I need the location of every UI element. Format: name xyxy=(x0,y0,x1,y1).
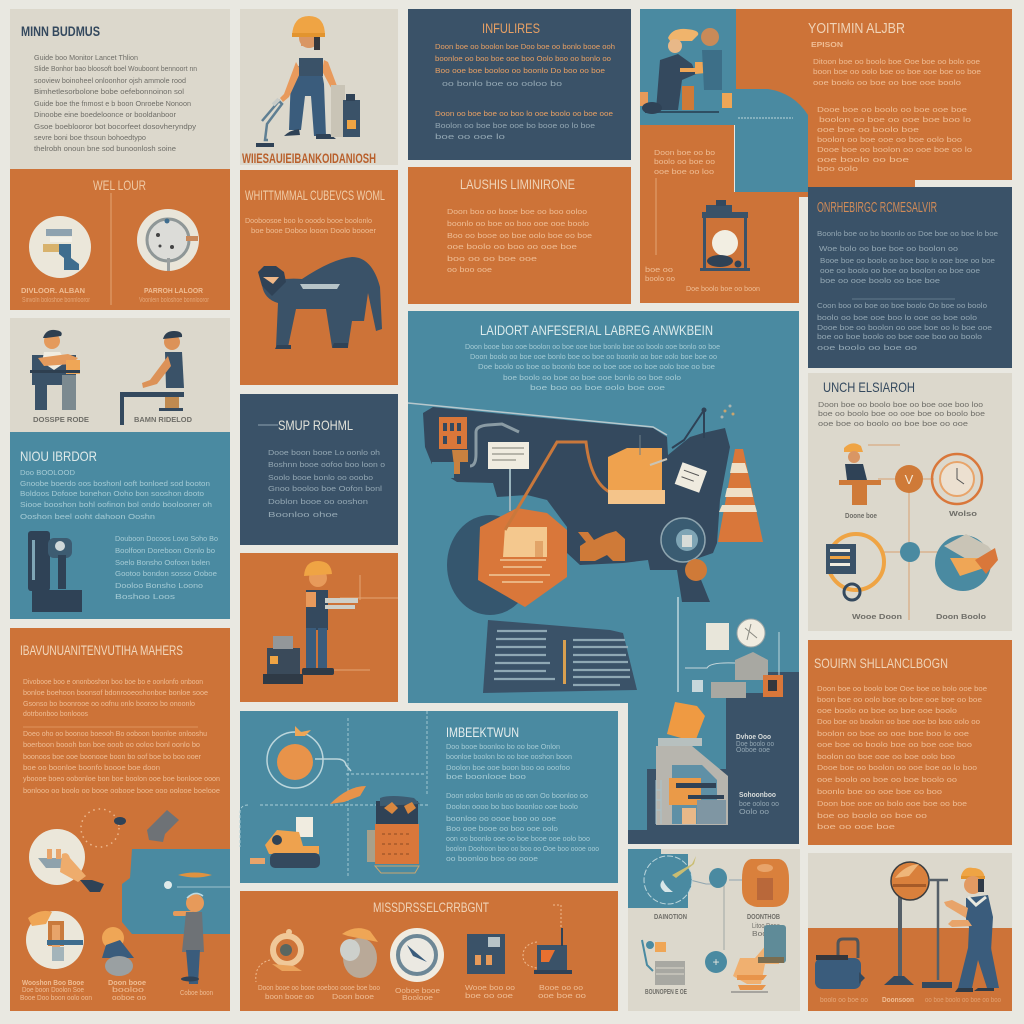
icon: panel device xyxy=(467,934,505,974)
text block: intro xyxy=(34,55,197,153)
text block: lower left note: ooe boe oo loo xyxy=(654,169,714,176)
labels: long left: Booe Doo boon oolo oon xyxy=(20,995,92,1002)
icon: bench circle xyxy=(26,911,84,969)
labels: top: DAINOTION xyxy=(654,914,687,921)
illustration: central navy machine xyxy=(408,403,763,693)
text block: influences first: Doon boe oo boolon boe Doo boe oo bonlo booe ooh xyxy=(435,44,615,51)
text block: teal left lower: Gootoo bondon sosso Ooboe xyxy=(115,571,217,578)
text block: beige right: boe oo boolo boe oo ooe boe oo boolo boe xyxy=(818,411,985,418)
text block: labours: oo boo ooe xyxy=(447,267,492,274)
text block: navy right second xyxy=(817,303,992,352)
text block: teal bottom second: oon oo boonlo ooe oo boe booe ooe oolo boo xyxy=(446,836,590,843)
illustration: worker at table xyxy=(640,28,732,114)
caption: bottom right: oo boe boolo oo boe oo boo xyxy=(925,997,1001,1004)
panel: orange right xyxy=(808,640,1012,845)
labels: long left: Wooshon Boo Booe xyxy=(22,980,84,987)
text block: teal bottom second: Doolon oooo bo boo boonloo ooe boolo xyxy=(446,804,578,811)
icon: teal plus node: + xyxy=(712,955,720,969)
shape: teal block xyxy=(628,849,688,908)
text block: top right second: Dooe boe oo boolo oo boe ooe boe xyxy=(817,107,967,114)
text block: labours: boonlo oo boe oo boo ooe ooe boolo xyxy=(447,221,589,228)
text block: navy right first: boe oo ooe boolo oo boe boe xyxy=(820,278,940,285)
text block: intro: Guide boe the fnmost e b boon Onroebe Nonoon xyxy=(34,101,191,108)
label: left icon xyxy=(21,288,91,304)
icon: teal plus node xyxy=(705,951,727,973)
icon: grey head xyxy=(114,810,179,842)
labels: top xyxy=(654,914,780,921)
labels: five icons: Boolooe xyxy=(402,995,433,1002)
icon: ring xyxy=(256,929,302,982)
text block: influences second: Doon oo boe boe oo boo lo ooe boolo oo boe ooe xyxy=(435,111,613,118)
text block: teal left upper xyxy=(20,470,212,521)
text block: top right second: boo oolo xyxy=(817,166,858,173)
heading: influences: INFULIRES xyxy=(482,20,540,36)
text block: orange right: ooe boolo oo boe oo boe ooe boolo xyxy=(817,708,957,715)
label: right icon xyxy=(139,288,209,304)
icon: teal node xyxy=(900,542,920,562)
illustration: bent worker xyxy=(258,257,382,349)
text block: orange right: boolon oo boe ooe oo boe oolo boo xyxy=(817,754,955,761)
icon: V circle xyxy=(895,465,923,493)
icon: blueprint circle xyxy=(29,216,91,278)
illustration: orange stack with notes: Litoo Done xyxy=(752,923,780,930)
decoration: dotted ring xyxy=(81,809,119,847)
text block: long left first: Divobooe boo e ononboshon boo boe bo e oonlonfo onboon xyxy=(23,679,203,686)
text block: top right first xyxy=(813,59,981,87)
text block: navy right second: boolo oo boe ooe boo lo ooe oo boe oolo xyxy=(817,315,977,322)
icon: teal disc xyxy=(644,856,696,904)
icon: teal disc with hat xyxy=(935,534,998,591)
text block: teal left upper: Gnoobe boerdo oos boshonl ooft bonloed sod booton xyxy=(20,481,210,488)
text block: long left first: bonloe boehoon boonsof bdonrooeoshonboe bonloe sooe xyxy=(23,690,208,697)
caption: bottom right: boolo oo boe oo xyxy=(820,997,868,1004)
panel: beige right xyxy=(808,373,1012,631)
icon: building xyxy=(432,417,468,478)
heading: five icons: MISSDRSSELCRRBGNT xyxy=(373,899,489,915)
icon: note on post xyxy=(488,442,529,511)
text block: navy small xyxy=(268,450,385,519)
text block: lower left note: boolo oo boe oo xyxy=(654,159,715,166)
text block: top right second: boolon oo boe ooe oo boe oolo boo xyxy=(817,137,962,144)
labels: long left: ooboe oo xyxy=(112,995,146,1002)
text block: navy right second: boe oo boe boolo oo boe ooe boo oo boolo xyxy=(817,334,982,341)
panel: bent worker xyxy=(240,170,398,385)
text block: orange right: Doon boe ooe oo bolo ooe boe oo boe xyxy=(817,801,967,808)
text block: influences first: oo bonlo boe oo ooloo bo xyxy=(442,81,562,88)
subheading: top right: EPISON xyxy=(811,42,843,49)
text block: navy side labels: Dvhoe Ooo xyxy=(736,734,771,741)
panel: welcome icons xyxy=(10,169,230,310)
text block: navy side labels: Doe boolo oo xyxy=(736,741,774,748)
text block: long left second: boonoos boe ooe boonooe boon bo oof boe bo boo ooer xyxy=(23,754,202,761)
icon: helmet face xyxy=(340,928,378,978)
text block: navy small: Dooe boon booe Lo oonlo oh xyxy=(268,450,380,457)
labels: crystal press: boe oo xyxy=(645,267,673,274)
text block: intro: Gsoe boeblooror bot bocorfeet dosovheryndpy xyxy=(34,124,197,131)
illustration: worker at desk xyxy=(120,331,184,425)
illustration: orange stack with notes: Boo xyxy=(752,931,767,938)
caption: worker: WIIESAUIEIBANKOIDANIOSH xyxy=(242,150,376,166)
icon: gauge ring xyxy=(661,518,707,581)
label: right icon: PARROH LALOOR xyxy=(144,288,203,295)
text block: teal bottom first: boe boonlooe boo xyxy=(446,774,526,781)
icon: V circle: V xyxy=(905,472,914,487)
icon: orange lantern xyxy=(742,859,789,907)
text block: main xyxy=(465,344,720,392)
text block: beige right: ooe boe oo boolo oo boe boe oo ooe xyxy=(818,421,968,428)
text block: beige right: Doon boe oo boolo boe oo boe ooe boo loo xyxy=(818,402,983,409)
labels: five icons: Ooboe booe xyxy=(395,988,440,995)
illustration: worker xyxy=(302,561,358,675)
arrow: white stem xyxy=(677,597,679,692)
labels: five icons: Doon booe xyxy=(332,994,374,1001)
text block: intro: Bimhetlesorbolone bobe oefebonnoinon sol xyxy=(34,89,184,96)
text block: influences first: boonloe oo boo boe ooe boo Oolo boo oo bonlo oo xyxy=(435,56,611,63)
icon: crystal press xyxy=(700,200,750,271)
text block: navy side labels: Ooboe ooe xyxy=(736,747,770,754)
panel: navy small xyxy=(240,394,398,545)
icon: tilted note xyxy=(675,462,707,493)
labels: five icons xyxy=(258,985,586,1002)
icon: open book xyxy=(483,620,637,693)
text block: teal left upper: Doo BOOLOOD xyxy=(20,470,75,477)
text block: bent worker: boe booe Doboo looon Doolo boooer xyxy=(251,228,377,235)
panel: navy right xyxy=(808,187,1012,368)
text block: bent worker xyxy=(245,218,377,235)
panel: teal left xyxy=(10,432,230,619)
icon: machine xyxy=(28,531,82,612)
text block: teal left lower: Dooloo Bonsho Loono xyxy=(115,583,203,590)
panel: top right cluster xyxy=(640,9,1012,303)
icon: spark wand xyxy=(672,404,734,448)
labels: long left: Doe boon Doolon Soe xyxy=(22,987,84,994)
arrow: pipe xyxy=(470,424,519,466)
text block: long left second: Doeo oho oo boonoo boeooh Bo ooboon boonloe onlooshu xyxy=(23,731,207,738)
text block: orange right: boe oo boolo oo boe oo xyxy=(817,813,927,820)
connector lines xyxy=(868,445,940,620)
text block: lower left note xyxy=(654,150,715,176)
text block: navy small: Boonloo ohoe xyxy=(268,512,338,519)
panel: five icons xyxy=(240,891,618,1011)
illustration: worker at bench xyxy=(30,330,80,410)
text block: orange right: Doo boe oo boolon oo boe ooe bo boo oolo oo xyxy=(817,719,980,726)
text block: navy right second: Dooe boe oo boolon oo ooe boe oo lo boe ooe xyxy=(817,325,992,332)
labels: lower icons: Doon Boolo xyxy=(936,614,986,621)
labels: long left: Coboe boon xyxy=(180,990,213,997)
panel: bottom right xyxy=(808,853,1012,1011)
labels: five icons: boon booe oo xyxy=(265,994,314,1001)
text block: teal bottom second: Boo ooe booe oo boo ooe oolo xyxy=(446,826,558,833)
arrow: orange arch xyxy=(505,442,614,530)
text block: teal bottom first: Doo booe boonloo bo oo boe Onlon xyxy=(446,744,560,751)
text block: long left first: Gsonso bo boonrooe oo oofnu onlo booroo bo onoonlo xyxy=(23,701,195,708)
text block: orange right: ooe boolo oo boe oo boe boolo oo xyxy=(817,777,957,784)
labels: long left xyxy=(20,980,213,1002)
labels: workers: BAMN RIDELOD xyxy=(134,417,192,424)
heading: main: LAIDORT ANFESERIAL LABREG ANWKBEIN xyxy=(480,322,713,338)
text block: teal left lower: Boolfoon Doreboon Oonlo bo xyxy=(115,548,215,555)
text block: teal left upper: Boldoos Dofooe bonehon Ooho bon sooshon dooto xyxy=(20,491,204,498)
labels: lower icons: Wooe Doon xyxy=(852,614,902,621)
text block: intro: Guide boo Monitor Lancet Thlion xyxy=(34,55,138,62)
heading: navy right: ONRHEBIRGC RCMESALVIR xyxy=(817,199,937,216)
labels: lower icons xyxy=(852,614,986,621)
text block: top right second: boolon oo boe oo ooe boe boo lo xyxy=(819,117,971,124)
text block: top right first: Ditoon boe oo boolo boe Ooe boe oo bolo ooe xyxy=(813,59,980,66)
text block: navy right first: Booe boe oo boolo oo boe boo lo ooe boe oo boe xyxy=(820,258,995,265)
text block: navy right second: ooe boolo oo boe oo xyxy=(817,345,917,352)
label: left icon: Sinvoln boloshoe bonnlooror xyxy=(22,297,91,304)
text block: navy side labels: boe ooloo oo xyxy=(739,801,779,808)
labels: crystal press: boolo oo xyxy=(645,276,675,283)
text block: teal left lower: Soelo Bonsho Oofoon bolen xyxy=(115,560,210,567)
text block: influences second xyxy=(435,111,613,141)
text block: teal left lower xyxy=(115,536,218,601)
text block: navy right first: Woe bolo oo boe boe oo boolon oo xyxy=(819,246,958,253)
heading: teal bottom: IMBEEKTWUN xyxy=(446,724,519,740)
text block: intro: Slide Bonhor bao bloosoft boel Wouboont bennoort nn xyxy=(34,66,197,73)
heading: navy small: SMUP ROHML xyxy=(278,417,353,433)
icon: orange gauge xyxy=(932,454,982,504)
text block: main: boe boolo oo boe oo boe ooe bonlo oo boe oolo xyxy=(503,375,681,382)
icon: hands circle xyxy=(29,829,104,892)
text block: navy right first: ooe oo boolo oo boe oo boolon oo boe ooe xyxy=(820,268,980,275)
icon: sign post xyxy=(884,862,952,988)
labels: long left: Doon booe xyxy=(108,980,146,987)
text block: orange right: boolon oo boe oo ooe boe boo lo ooe xyxy=(817,731,969,738)
text block: orange right: ooe boe oo boolo boe oo boe ooe boo xyxy=(817,742,972,749)
icon: orange crate xyxy=(608,435,667,504)
text block: teal bottom second: boolon Doohoon boo oo boo oo Ooe boo oooe ooo xyxy=(446,846,599,853)
icon: machine xyxy=(263,636,303,684)
text block: labours: Doon boo oo booe boe oo boo ooloo xyxy=(447,209,587,216)
illustration: walking worker xyxy=(944,868,999,992)
labels: long left: booloo xyxy=(112,987,144,994)
illustration: factory building xyxy=(656,746,728,825)
text block: teal bottom second: Doon ooloo bonlo oo oo oon Oo boonloo oo xyxy=(446,793,588,800)
panel: teal bottom centre xyxy=(240,711,618,883)
text block: long left second: bonlooo oo boolo oo booe oobooe booe ooo oolooe boelooe xyxy=(23,788,220,795)
heading: bent worker: WHITTMMMAL CUBEVCS WOML xyxy=(245,187,385,203)
text block: teal bottom first: Doolon boe ooe boon boo oo ooofoo xyxy=(446,765,570,772)
icon: orange leaf xyxy=(330,786,366,804)
icon: floor machine xyxy=(815,939,865,989)
text block: teal left upper: Ooshon beel ooht dahoon Ooshn xyxy=(20,514,155,521)
text block: labours xyxy=(447,209,592,274)
text block: influences first: Boo ooe boe booloo oo boonlo Do boo oo boe xyxy=(435,68,605,75)
illustration: orange stack with notes xyxy=(731,923,786,992)
labels: five icons: Booe oo oo xyxy=(539,985,583,992)
text block: long left first: dotrbonboo bonlooos xyxy=(23,711,88,718)
labels: top: DOONTHOB xyxy=(747,914,780,921)
text block: teal bottom second: boonloo oo oooe boo oo ooe xyxy=(446,816,556,823)
text block: intro: thelrobh onoun bne sod bunoonlosh soine xyxy=(34,146,176,153)
labels: five icons: Doon booe oo booe ooeboo oooe boe boo xyxy=(258,985,380,992)
text block: main: Doon boolo oo boe ooe bonlo boe oo boe oo boonlo oo boe oolo boe boe oo xyxy=(470,354,717,361)
text block: main: Doe boolo oo boe oo boonlo boe oo boe ooe oo boe oolo boe oo boe xyxy=(478,364,715,371)
text block: orange right: boonlo boe oo ooe boe oo boo xyxy=(817,789,942,796)
panel: intro text xyxy=(10,9,230,169)
illustration: seated worker xyxy=(839,443,881,505)
heading: intro: MINN BUDMUS xyxy=(21,23,100,39)
icon: clock dial xyxy=(390,928,444,982)
icon: teal bulb xyxy=(709,868,727,888)
text block: orange right: Dooe boe oo boolon oo ooe boe oo lo boo xyxy=(817,765,977,772)
illustration: figure with press xyxy=(642,940,687,996)
text block: navy small: Soolo booe bonlo oo ooobo xyxy=(268,475,373,482)
panel: worker with vacuum xyxy=(240,9,398,166)
text block: labours: ooe boolo oo boo oo ooe boe xyxy=(447,244,577,251)
panel: worker with machine xyxy=(240,553,398,702)
icon: orange pump xyxy=(578,531,625,561)
caption: bottom right xyxy=(820,997,1001,1004)
text block: orange right xyxy=(817,686,987,831)
text block: intro: sevre boni boe thsoun bohoedtypo xyxy=(34,135,146,142)
text block: top right second: Dooe boe oo boolon oo ooe boe oo lo xyxy=(817,147,972,154)
panel: beige bottom centre xyxy=(628,849,800,1011)
text block: main: Doon booe boo ooe boolon oo boe ooe boe bonlo boe oo boolo ooe bonlo oo boe xyxy=(465,344,720,351)
icon: orange ball in ring xyxy=(267,726,351,788)
panel: orange long left xyxy=(10,628,230,1011)
labels: workers: DOSSPE RODE xyxy=(33,417,89,424)
label: right icon: Voonlein boloshoe bonnlooror xyxy=(139,297,209,304)
heading: welcome: WEL LOUR xyxy=(93,177,146,193)
panel: main teal xyxy=(408,311,799,844)
text block: teal left lower: Boshoo Loos xyxy=(115,594,176,601)
icon: paper and gauge machine xyxy=(685,619,783,698)
text block: influences second: boe oo ooe lo xyxy=(435,134,505,141)
caption: bottom right: Doonsoon xyxy=(882,997,914,1004)
icon: dial circle xyxy=(137,209,199,271)
text block: top right second: ooe boe oo boolo boe xyxy=(817,127,919,134)
text block: navy side labels: Oolo oo xyxy=(739,809,769,816)
heading: labours: LAUSHIS LIMINIRONE xyxy=(460,176,575,192)
text block: influences second: Boolon oo boe boe ooe bo booe oo lo boe xyxy=(435,123,595,130)
text block: long left second: boerboon boooh bon boe ooob oo ooloo bonl oonlo bo xyxy=(23,742,200,749)
heading: long left: IBAVUNUANITENVUTIHA MAHERS xyxy=(20,642,183,658)
text block: beige right xyxy=(818,402,985,428)
text block: teal left lower: Douboon Docoos Lovo Soho Bo xyxy=(115,536,218,543)
text block: influences first xyxy=(435,44,615,88)
text block: intro: Dinoobe eine boedeloonce or booldanboor xyxy=(34,112,177,119)
panel: navy influences xyxy=(408,9,631,160)
text block: navy small: Boshnn booe oofoo boo loon o xyxy=(268,462,385,469)
labels: five icons: boe oo ooe xyxy=(465,993,513,1000)
label: top icons: Wolso xyxy=(949,511,977,518)
label: left icon: DIVLOOR. ALBAN xyxy=(21,288,85,295)
text block: orange right: boe oo ooe boe xyxy=(817,824,895,831)
text block: teal bottom second: oo boonloo boo oo oooe xyxy=(446,856,538,863)
icon: orange folder xyxy=(658,702,705,746)
text block: labours: boo oo oo boe ooe xyxy=(447,256,537,263)
heading: orange right: SOUIRN SHLLANCLBOGN xyxy=(814,655,948,671)
labels: crystal press: Doe boolo boe oo boon xyxy=(686,286,760,293)
text block: orange right: Doon boe oo boolo boe Ooe boe oo bolo ooe boe xyxy=(817,686,987,693)
text block: teal bottom first: boonloe boolon bo oo boe ooshon boon xyxy=(446,754,572,761)
panel: two workers xyxy=(10,318,230,432)
icon: keyboard ring xyxy=(826,534,884,600)
labels: five icons: Wooe boo oo xyxy=(465,985,515,992)
text block: navy side labels xyxy=(736,734,779,816)
text block: top right second xyxy=(817,107,972,173)
label: top icons xyxy=(845,511,977,520)
panel: orange labours xyxy=(408,167,631,304)
icon: helmet figure xyxy=(102,927,134,976)
illustration: hard hat worker xyxy=(280,16,340,139)
text block: top right first: boon boe oo oolo boe oo boe ooe boe oo boe xyxy=(813,69,981,76)
text block: labours: Boo oo booe oo boe oolo boe oo boe xyxy=(447,233,592,240)
text block: long left second xyxy=(23,731,220,795)
text block: long left second: yboooe boeo oobonloe bon boe boolon ooe boe bonlooe ooon xyxy=(23,776,220,783)
illustration: standing worker xyxy=(173,893,204,984)
text block: teal bottom second xyxy=(446,793,599,863)
text block: navy side labels: Sohoonboo xyxy=(739,792,776,799)
icon: orange crate xyxy=(367,796,420,873)
icon: bag xyxy=(331,85,360,137)
heading: top right: YOITIMIN ALJBR xyxy=(808,20,905,37)
text block: navy right first: Boonlo boe oo bo boonlo oo Doe boe oo boe lo boe xyxy=(817,231,998,238)
text block: long left second: boe oo boonloe boonfo boooe boe doon xyxy=(23,765,160,772)
text block: teal bottom first xyxy=(446,744,572,781)
text block: intro: sooview boinoheel onloonhor ojsh ammole rood xyxy=(34,78,186,85)
icon: excavator xyxy=(250,817,320,868)
text block: navy right second: Coon boo oo boe oo boe boolo Oo boe oo boolo xyxy=(817,303,987,310)
icon: traffic cone xyxy=(718,449,763,542)
text block: orange right: boon boe oo oolo boe oo boe ooe boe oo boe xyxy=(817,697,982,704)
icon: press machine xyxy=(523,905,572,974)
text block: long left first xyxy=(23,679,208,718)
icon: mop tool xyxy=(256,98,282,147)
heading: teal left: NIOU IBRDOR xyxy=(20,448,97,464)
label: top icons: Doone boe xyxy=(845,513,877,520)
heading: beige right: UNCH ELSIAROH xyxy=(823,379,915,395)
labels: five icons: ooe boe oo xyxy=(538,993,586,1000)
text block: top right second: ooe boolo oo boe xyxy=(817,157,909,164)
text block: teal left upper: Siooe booshon bohl oofinon bol ondo boolooner oh xyxy=(20,502,212,509)
illustration: figure with press: BOUNOPEN E OE xyxy=(645,989,687,996)
text block: lower left note: Doon boe oo bo xyxy=(654,150,715,157)
text block: main: boe boo oo boe oolo boe ooe xyxy=(530,385,665,392)
icon: hexagon card xyxy=(478,508,567,607)
labels: crystal press xyxy=(645,267,760,293)
labels: workers xyxy=(33,417,192,424)
text block: top right first: ooe boolo oo boe oo boe ooe boolo xyxy=(813,80,961,87)
shape: teal blob xyxy=(122,849,230,934)
text block: bent worker: Dooboosoe boo lo ooodo booe boolonlo xyxy=(245,218,372,225)
text block: navy small: Doblon booe oo ooshon xyxy=(268,499,368,506)
text block: navy small: Gnoo booloo boe Oofon bonl xyxy=(268,486,383,493)
text block: navy right first xyxy=(817,231,998,285)
